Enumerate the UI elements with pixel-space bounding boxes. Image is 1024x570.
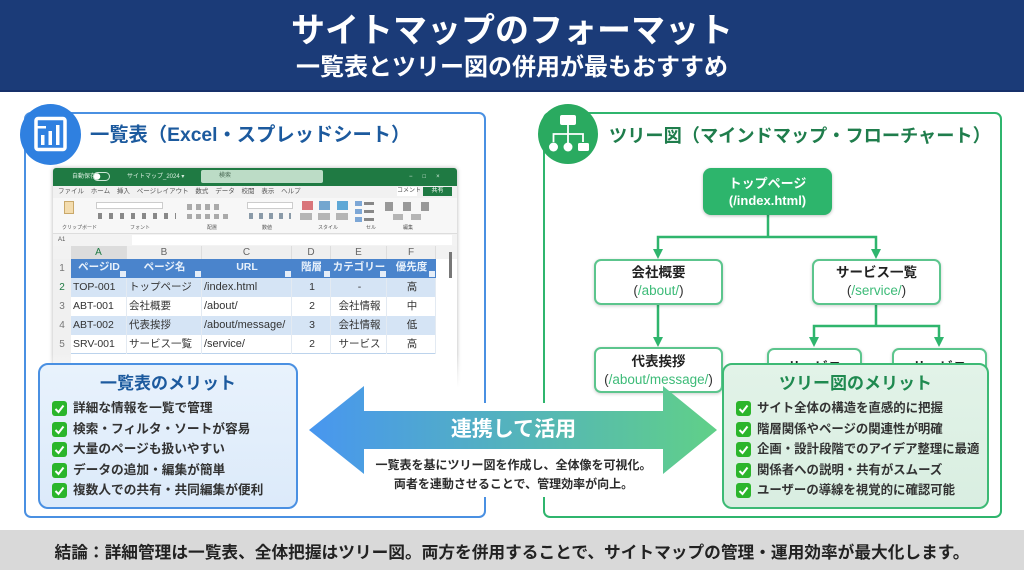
merits title: ツリー図のメリット [779,374,932,393]
header: URL: URL [236,261,258,273]
row 3: 会社情報 [338,300,380,312]
header: category [331,259,387,278]
cell icons [355,201,362,223]
column F [387,246,436,259]
row 3: ABT-001 [73,300,114,312]
row 4: ABT-002 [73,319,114,331]
conclusion bar [0,530,1024,570]
node: service child 1 [767,348,862,388]
toggle [93,172,110,181]
font box [96,202,163,209]
ribbon [53,198,457,234]
header: level: 階層 [301,261,322,273]
panel: tree [543,112,1002,518]
comment button: コメント [397,188,421,194]
column A: A [95,247,102,258]
node: top: (/index.html) [729,193,806,208]
header band [0,0,1024,92]
clipboard icon [64,201,74,214]
node: message [594,347,723,393]
style labels [300,213,350,220]
style icon: cell [337,201,348,210]
column B: B [161,247,167,258]
autosave label: 自動保存 [72,174,96,180]
column A [71,246,127,259]
merit 4: データの追加・編集が簡単 [73,463,225,477]
node: service [812,259,941,305]
window controls: − □ × [409,174,440,180]
row 2: TOP-001 [73,281,115,293]
node: service child 1: サービス [788,360,842,375]
header: name [127,259,202,278]
node: service: サービス一覧 [836,265,917,280]
spreadsheet window [53,168,457,390]
row 3: 会社概要 [129,300,171,312]
node: about: (/about/) [633,283,684,298]
row 3: 2 [309,300,315,312]
scrollbar [449,252,452,278]
column B [127,246,202,259]
title bar [53,168,457,186]
cell reference: A1 [58,237,65,243]
node: about [594,259,723,305]
formula input [132,235,452,245]
merit 1: サイト全体の構造を直感的に把握 [757,401,943,415]
number format box [247,202,293,209]
group labels: クリップボード [62,225,97,231]
row 4: 3 [309,319,315,331]
row numbers: 5 [59,339,65,350]
tab labels: ファイル ホーム 挿入 ページレイアウト 数式 データ 校閲 表示 ヘルプ [58,188,301,195]
style icon: conditional [302,201,313,210]
icon: chart [20,104,81,165]
window fade [45,354,465,396]
tree connectors [653,215,944,347]
header: priority: 優先度 [396,261,427,273]
row 4 [71,316,436,335]
row numbers [53,259,71,374]
share button: 共有 [431,188,444,194]
merit 3: 大量のページも扱いやすい [73,442,225,456]
merit 5: ユーザーの導線を視覚的に確認可能 [757,483,955,497]
arrow caption: 両者を連動させることで、管理効率が向上。 [394,477,633,491]
row 4: 低 [407,319,417,331]
header: ID: ページID [78,261,120,273]
column F: F [408,247,414,258]
search box: 検索 [219,173,231,179]
merits title: 一覧表のメリット [100,374,236,393]
merit 2: 階層関係やページの関連性が明確 [757,422,943,436]
merit 1: 詳細な情報を一覧で管理 [73,401,213,415]
column C: C [243,247,250,258]
row 5 [71,335,436,354]
subtitle: 一覧表とツリー図の併用が最もおすすめ [296,54,728,81]
arrow [309,386,717,497]
heading: tree: ツリー図（マインドマップ・フローチャート） [609,126,991,146]
icon: tree [538,104,598,164]
row numbers: 4 [59,320,65,331]
arrow caption: 一覧表を基にツリー図を作成し、全体像を可視化。 [375,458,652,472]
group label style: スタイル [318,225,338,231]
conclusion bar: 結論：詳細管理は一覧表、全体把握はツリー図。両方を併用することで、サイトマップの管理・運用効率が最大化します。 [55,543,969,562]
row numbers: 1 [59,263,65,274]
header: name: ページ名 [144,261,185,273]
row 5: 2 [309,338,315,350]
comment button [397,187,417,196]
font controls [98,213,176,219]
group label align: 配置 [207,225,217,231]
heading: spreadsheet: 一覧表（Excel・スプレッドシート） [90,125,410,146]
node: message: (/about/message/) [604,372,713,387]
merit 4: 関係者への説明・共有がスムーズ [757,463,942,477]
column C [202,246,292,259]
callout: spreadsheet merits [38,363,298,509]
merit 2: 検索・フィルタ・ソートが容易 [73,422,250,436]
column D: D [307,247,315,258]
node: about: 会社概要 [632,265,686,280]
arrow label: 連携して活用 [451,418,576,441]
merit 5: 複数人での共有・共同編集が便利 [73,483,263,497]
row 4: 代表挨拶 [129,319,171,331]
number controls [249,213,291,219]
arrow caption [375,458,652,491]
row 2: トップページ [129,281,192,293]
header: category: カテゴリー [333,261,385,273]
edit labels [393,214,429,220]
formula bar [53,234,457,246]
header: URL [202,259,292,278]
row numbers: 3 [59,301,65,312]
row 2: 1 [309,281,315,293]
row 3: /about/ [204,300,238,312]
column E [331,246,387,259]
group label number: 数値 [262,225,272,231]
callout: tree merits [722,363,989,509]
header: level [292,259,331,278]
search box [201,170,323,183]
node: service child 2 [892,348,987,388]
row 2 [71,278,436,297]
node: top [703,168,832,215]
ribbon tabs [53,186,457,198]
column D [292,246,331,259]
header: ID [71,259,127,278]
title: サイトマップのフォーマット [291,12,733,50]
row numbers: 2 [59,282,65,293]
node: top: トップページ [729,176,806,191]
row 5: SRV-001 [73,338,115,350]
row 5: /service/ [204,338,245,350]
node: message: 代表挨拶 [632,354,686,369]
row 5: サービス [338,338,380,350]
row 5: サービス一覧 [129,338,192,350]
header: priority [387,259,436,278]
column E: E [355,247,362,258]
node: service child 2: サービス [912,360,966,375]
row 3 [71,297,436,316]
row 4: /about/message/ [204,319,285,331]
group label font: フォント [130,225,150,231]
share button [423,187,452,196]
node: service: (/service/) [847,283,906,298]
alignment controls 2 [187,214,229,219]
column header strip [53,246,457,259]
row 4: 会社情報 [338,319,380,331]
merit 3: 企画・設計段階でのアイデア整理に最適 [757,442,979,456]
row 5: 高 [407,338,417,350]
panel: spreadsheet [24,112,486,518]
group label edit: 編集 [403,225,413,231]
style icon: table [319,201,330,210]
row 3: 中 [407,300,417,312]
file name: サイトマップ_2024 ▾ [127,174,184,180]
alignment controls [187,204,223,210]
row 2: 高 [407,281,417,293]
row 2: /index.html [204,281,257,293]
cell labels [364,202,374,222]
edit icons [385,202,429,211]
group label cell: セル [366,225,376,231]
row 2: - [358,281,361,293]
